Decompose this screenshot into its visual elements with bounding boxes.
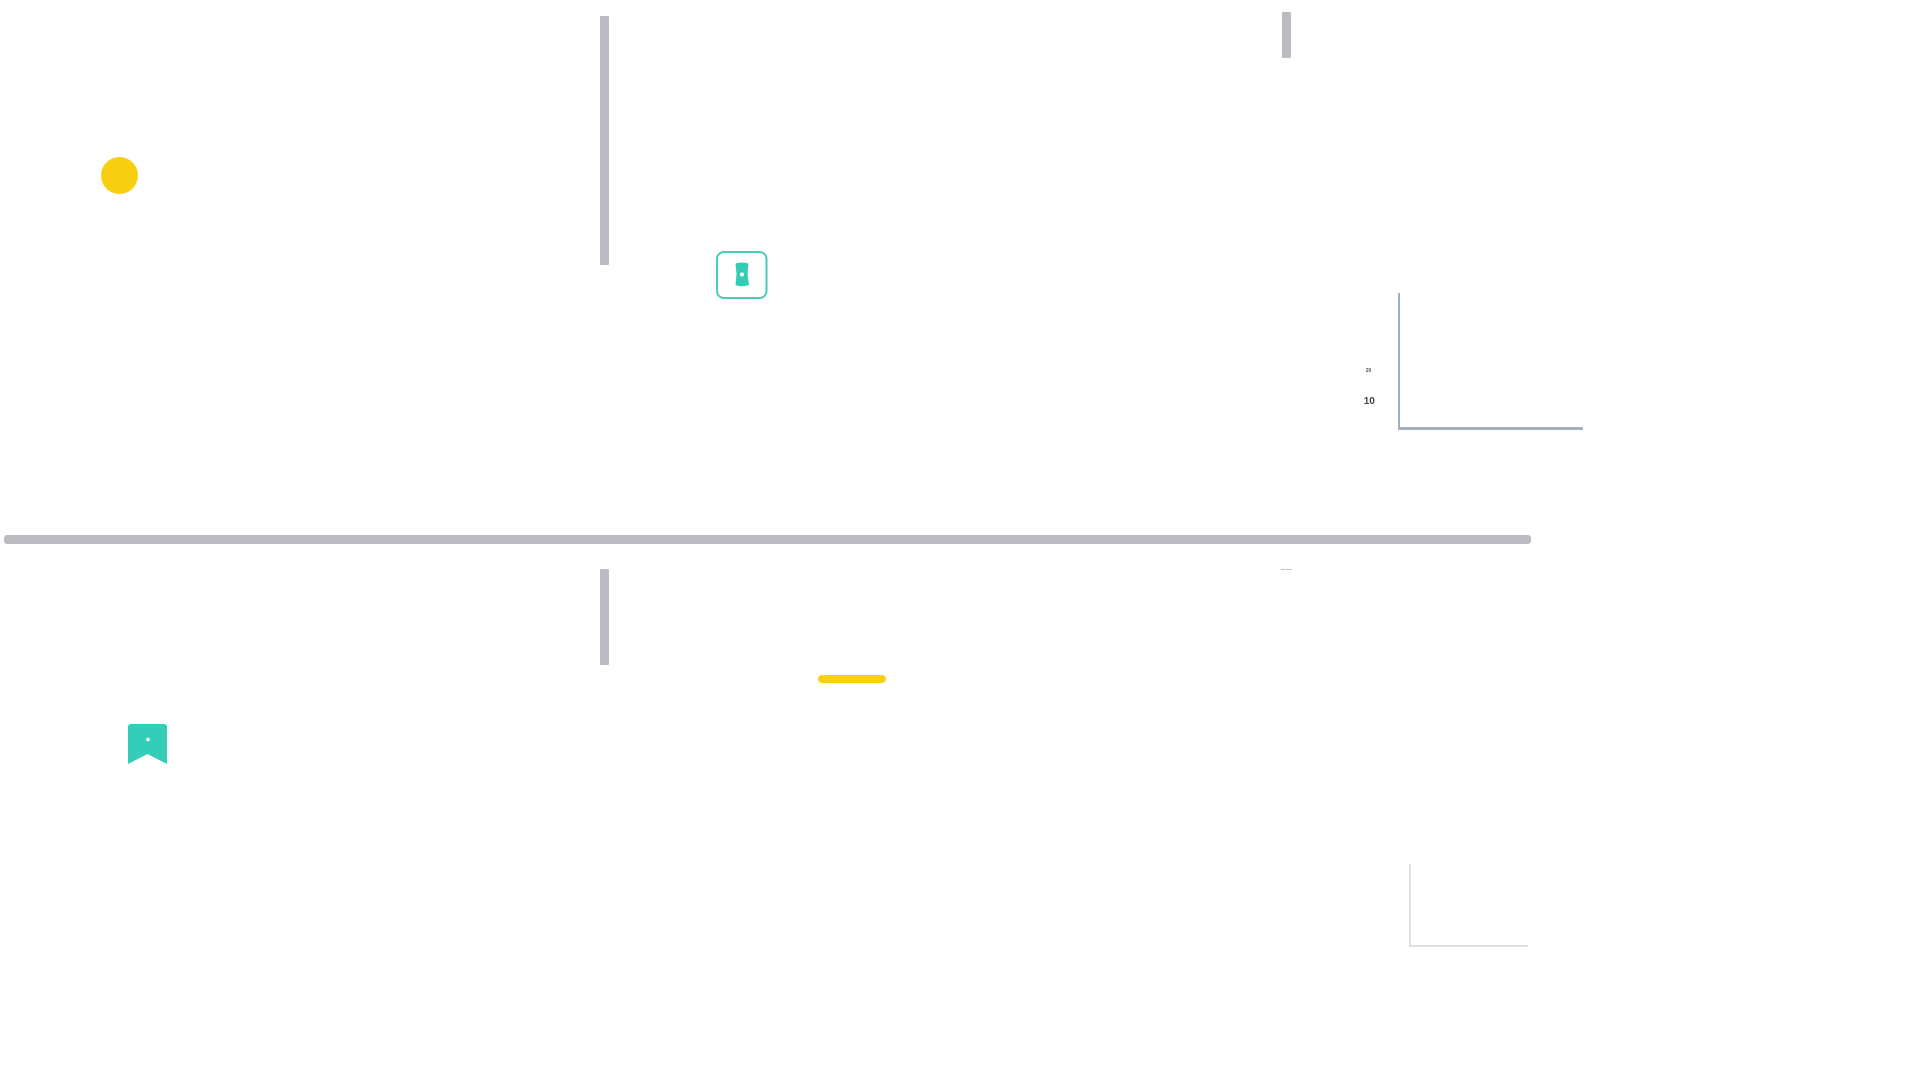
divider: horizontal grey bar xyxy=(4,535,1531,544)
icon: teal outlined square with spool xyxy=(716,251,768,299)
y axis line xyxy=(1398,293,1400,429)
divider: vertical grey bar, top right xyxy=(1282,12,1290,58)
divider: vertical grey bar, top left xyxy=(600,16,609,265)
y axis label 20: 20 xyxy=(1366,368,1371,374)
chart: upper axes xyxy=(1364,293,1583,430)
y axis line xyxy=(1409,864,1411,947)
icon: teal bookmark xyxy=(128,724,167,764)
icon: yellow pill xyxy=(818,674,886,683)
icon: yellow circle xyxy=(101,157,138,194)
x axis line xyxy=(1409,945,1528,947)
x axis line xyxy=(1398,427,1583,430)
chart: lower axes xyxy=(1409,864,1528,947)
divider: vertical grey bar, bottom left xyxy=(600,569,609,665)
divider: short dash, bottom right xyxy=(1281,568,1292,570)
y axis label 10: 10 xyxy=(1364,396,1375,407)
